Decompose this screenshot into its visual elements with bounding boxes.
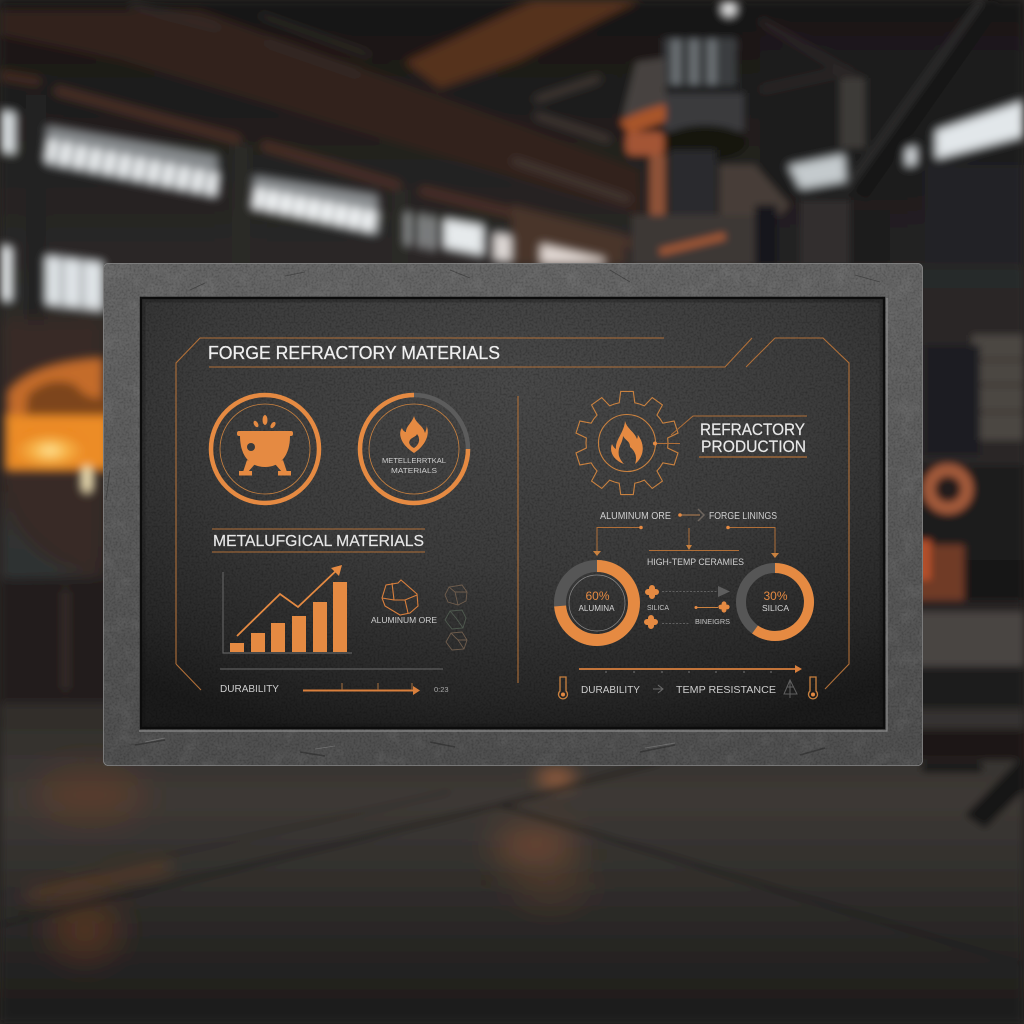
- heading: refractory production: PRODUCTION: [701, 437, 806, 456]
- label: aluminum ore: ALUMINUM ORE: [371, 615, 437, 625]
- trend arrow: [237, 565, 342, 636]
- divider: [220, 668, 443, 670]
- factory floor: [0, 702, 1024, 1024]
- title: FORGE REFRACTORY MATERIALS: [208, 342, 500, 363]
- donut: 60% alumina: [560, 566, 634, 640]
- heading: refractory production: REFRACTORY: [700, 420, 805, 439]
- icon: small hazard triangle: [784, 680, 797, 698]
- press machinery: [622, 0, 997, 265]
- heading: metallurgical materials: METALUFGICAL MATERIALS: [213, 533, 424, 550]
- process flow: ALUMINUM ORE: [600, 511, 671, 522]
- icon: right thermometer: [808, 677, 818, 699]
- donut: 60% alumina: ALUMINA: [578, 604, 615, 613]
- scale arrow: [579, 665, 802, 673]
- icon: flame progress badge: MATERIALS: [391, 466, 437, 475]
- label: durability to temp resistance: TEMP RESISTANCE: [676, 684, 776, 696]
- icon: gear with flame: [574, 391, 680, 495]
- right side machine: [915, 270, 1024, 828]
- durability arrow gauge: [303, 683, 449, 695]
- icon: aluminum ore rock: [382, 580, 418, 615]
- callout leader: [653, 416, 807, 446]
- central legend between donuts: BINEIGRS: [695, 617, 730, 626]
- label: durability: DURABILITY: [220, 683, 279, 695]
- factory back wall and beams: [0, 0, 1024, 720]
- icon: left thermometer: [558, 677, 568, 699]
- dark inner panel: [140, 297, 885, 729]
- icon: flame progress badge: METELLERRTKAL: [382, 456, 446, 465]
- factory windows: [0, 1, 1024, 312]
- process flow: FORGE LININGS: [709, 511, 777, 522]
- donut: 30% silica: SILICA: [762, 604, 790, 613]
- donut: 30% silica: 30%: [763, 589, 788, 603]
- decorative circuit border: [176, 338, 849, 690]
- bar chart: [223, 565, 352, 653]
- donut: 30% silica: [741, 568, 809, 636]
- steel frame: [103, 263, 923, 766]
- label: durability to temp resistance: [581, 684, 776, 696]
- process flow: [593, 509, 779, 567]
- icon: flame progress badge: [360, 395, 468, 503]
- durability arrow gauge: 0:23: [434, 685, 449, 694]
- label: durability to temp resistance: DURABILITY: [581, 684, 640, 696]
- heading: refractory production: [699, 420, 807, 457]
- central legend between donuts: [644, 585, 730, 629]
- donut: 60% alumina: 60%: [585, 589, 610, 603]
- central legend between donuts: SILICA: [647, 603, 669, 612]
- icons: small ore rocks: [445, 585, 467, 650]
- furnace fire glow: [0, 318, 110, 705]
- icon: cauldron badge: [211, 395, 319, 503]
- process flow: HIGH-TEMP CERAMIES: [647, 557, 744, 567]
